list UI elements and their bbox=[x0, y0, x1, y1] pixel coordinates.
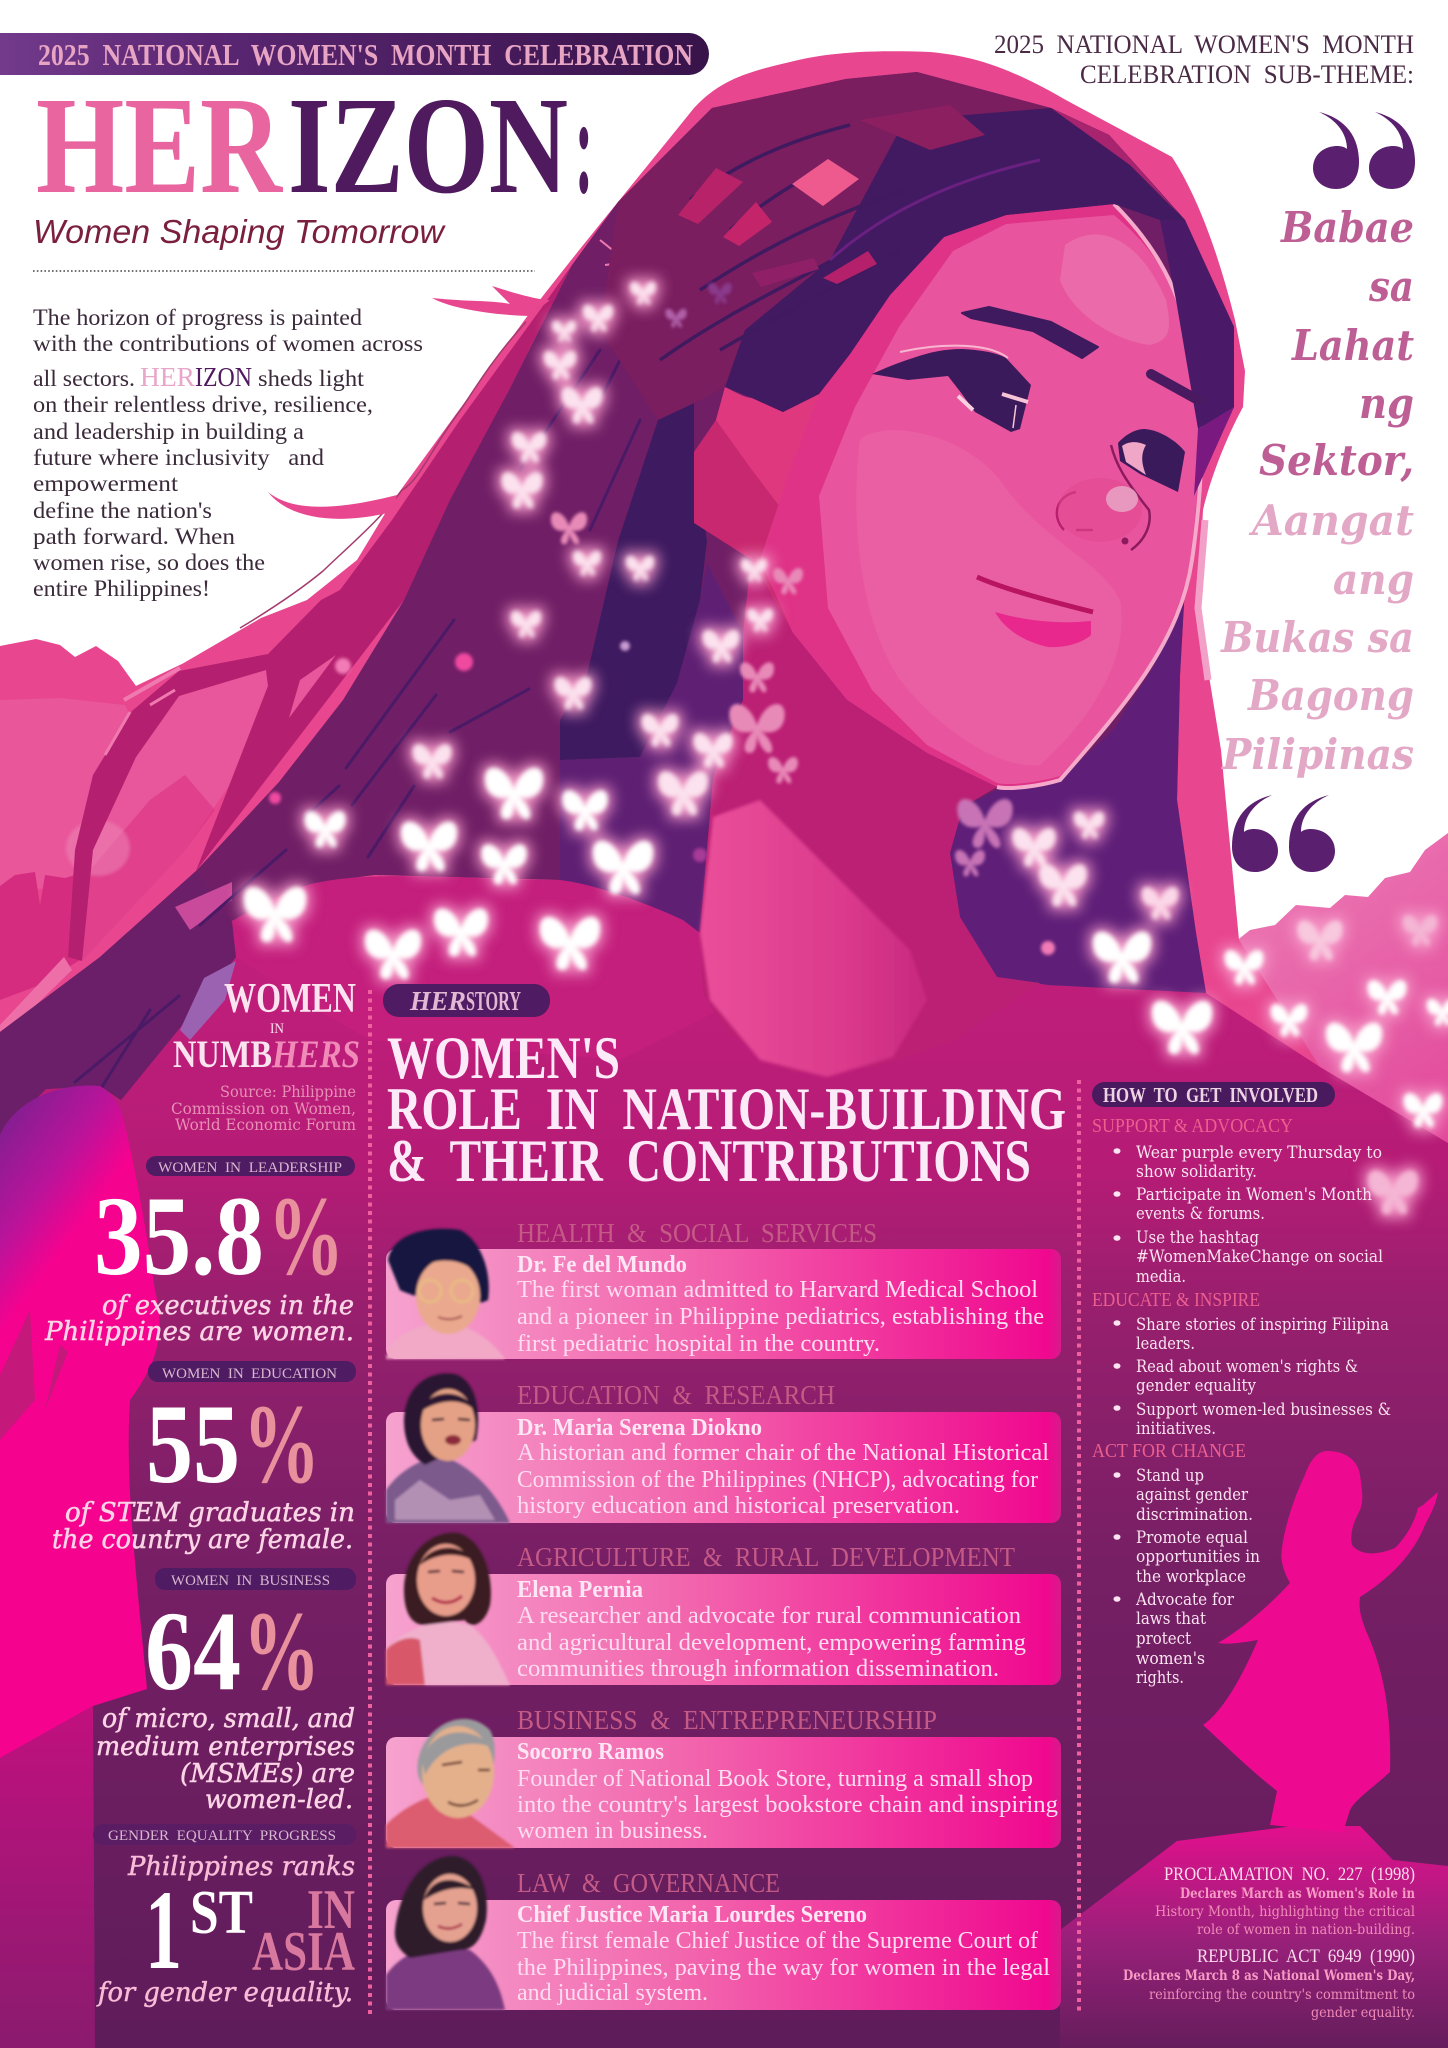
card: health & social services: first pediatric hospital in the country. bbox=[517, 1331, 880, 1357]
stat: women in business: 64 bbox=[145, 1589, 241, 1714]
eyebrow right bbox=[1151, 374, 1198, 400]
how to get involved list: Use the hashtag bbox=[1136, 1228, 1259, 1248]
face bbox=[600, 72, 1234, 788]
dark central hair band bbox=[560, 403, 707, 760]
sub-theme quote: Sektor, bbox=[1259, 436, 1414, 485]
sub-theme heading: CELEBRATION SUB-THEME: bbox=[1080, 60, 1414, 89]
how to get involved list: Advocate for bbox=[1135, 1590, 1235, 1610]
card: business & entrepreneurship: Founder of National Book Store, turning a small shop bbox=[517, 1766, 1033, 1792]
main heading: WOMEN'S bbox=[387, 1025, 620, 1091]
glowing dots bbox=[269, 641, 1055, 955]
intro paragraph: with the contributions of women across bbox=[33, 331, 423, 356]
portrait: Dr. Maria Serena Diokno bbox=[386, 1373, 510, 1523]
how to get involved list: Participate in Women's Month bbox=[1136, 1185, 1372, 1205]
main heading: & THEIR CONTRIBUTIONS bbox=[387, 1128, 1031, 1194]
portrait: Socorro Ramos bbox=[386, 1719, 515, 1848]
intro paragraph: and leadership in building a bbox=[33, 419, 304, 444]
card: education & research bbox=[386, 1373, 1061, 1523]
sub-theme quote: Bagong bbox=[1247, 671, 1414, 720]
sub-theme quote bbox=[1220, 203, 1414, 779]
portrait: Elena Pernia bbox=[386, 1533, 510, 1685]
legal references: REPUBLIC ACT 6949 (1990) bbox=[1197, 1946, 1415, 1967]
butterflies: pink, no glow bbox=[551, 283, 1013, 876]
how to get involved list: opportunities in bbox=[1136, 1547, 1260, 1567]
card: business & entrepreneurship: women in business. bbox=[517, 1818, 708, 1844]
stat: gender equality progress bbox=[93, 1824, 356, 2008]
card: business & entrepreneurship: BUSINESS & ENTREPRENEURSHIP bbox=[517, 1705, 937, 1735]
title: HERIZON: IZON bbox=[288, 69, 568, 223]
stat: women in business: % bbox=[243, 1589, 320, 1714]
HERSTORY pill bbox=[383, 984, 550, 1017]
stat: gender equality progress: 1 bbox=[145, 1868, 182, 1993]
card: law & governance bbox=[386, 1856, 1061, 2010]
top banner: 2025 NATIONAL WOMEN'S MONTH CELEBRATION bbox=[38, 37, 693, 72]
sub-theme quote: Aangat bbox=[1248, 496, 1414, 545]
how to get involved pill: HOW TO GET INVOLVED bbox=[1103, 1083, 1318, 1107]
stat: women in business: (MSMEs) are bbox=[180, 1759, 355, 1789]
hair flicks bbox=[432, 286, 550, 316]
stat: women in business: medium enterprises bbox=[96, 1732, 355, 1762]
card: education & research: A historian and former chair of the National Historical bbox=[517, 1440, 1049, 1466]
stat: women in business: WOMEN IN BUSINESS bbox=[171, 1573, 330, 1589]
card: law & governance: the Philippines, paving the way for women in the legal bbox=[517, 1955, 1050, 1981]
how to get involved list: discrimination. bbox=[1136, 1505, 1253, 1525]
intro paragraph bbox=[33, 305, 423, 601]
title: HERIZON bbox=[36, 69, 593, 223]
card: agriculture & rural development: communities through information dissemination. bbox=[517, 1656, 999, 1682]
hair streaks bbox=[75, 300, 650, 1090]
sub-theme quote: Bukas sa bbox=[1220, 613, 1414, 662]
card: law & governance: LAW & GOVERNANCE bbox=[517, 1868, 780, 1898]
how to get involved list: Stand up bbox=[1136, 1466, 1204, 1486]
how to get involved list: SUPPORT & ADVOCACY bbox=[1092, 1115, 1293, 1137]
legal references: role of women in nation-building. bbox=[1197, 1922, 1415, 1938]
dark hair right of neck bbox=[950, 496, 1206, 993]
card: agriculture & rural development: A researcher and advocate for rural communication bbox=[517, 1603, 1021, 1629]
left silhouette: woman in hot pink bbox=[0, 1085, 160, 2048]
intro paragraph: IZON bbox=[195, 362, 252, 392]
how to get involved list: rights. bbox=[1136, 1668, 1184, 1688]
inner hair band bbox=[68, 265, 572, 961]
stat: gender equality progress: for gender equality. bbox=[96, 1978, 353, 2008]
intro paragraph: sheds light bbox=[258, 366, 365, 391]
portrait: Chief Justice Maria Lourdes Sereno bbox=[386, 1856, 505, 2010]
inner veil window bbox=[82, 670, 268, 961]
how to get involved list: EDUCATE & INSPIRE bbox=[1092, 1289, 1260, 1311]
heading: Women in NumbHERS: HERS bbox=[271, 1033, 360, 1076]
shoulder bbox=[232, 876, 720, 1060]
source note: Source: Philippine bbox=[220, 1082, 356, 1101]
left cloud background bbox=[0, 639, 300, 1060]
card: agriculture & rural development: and agricultural development, empowering farming bbox=[517, 1630, 1026, 1656]
card: education & research: Dr. Maria Serena Diokno bbox=[517, 1415, 762, 1441]
intro paragraph: HER bbox=[140, 362, 195, 392]
nose bbox=[1111, 445, 1150, 550]
right silhouette: dancing woman on hill bbox=[1060, 1451, 1448, 2048]
top banner bbox=[0, 33, 709, 75]
card: health & social services: HEALTH & SOCIAL SERVICES bbox=[517, 1218, 877, 1248]
stat: women in education: of STEM graduates in bbox=[65, 1498, 355, 1528]
eyebrow left bbox=[962, 307, 1098, 358]
hair tiles bbox=[792, 159, 859, 206]
card: business & entrepreneurship: Socorro Ramos bbox=[517, 1739, 664, 1765]
heading: Women in NumbHERS: NUMB bbox=[173, 1033, 272, 1076]
card: education & research: history education and historical preservation. bbox=[517, 1493, 960, 1519]
how to get involved list: leaders. bbox=[1136, 1334, 1195, 1354]
lilac hair patches bbox=[175, 882, 232, 930]
heading: Women in NumbHERS: WOMEN bbox=[224, 976, 356, 1022]
main hair mass bbox=[0, 72, 1234, 1135]
card: business & entrepreneurship: into the country's largest bookstore chain and inspiring bbox=[517, 1792, 1058, 1818]
stat: women in business: of micro, small, and bbox=[102, 1704, 355, 1734]
sub-theme heading: 2025 NATIONAL WOMEN'S MONTH bbox=[994, 30, 1414, 59]
how to get involved list: Support women-led businesses & bbox=[1136, 1400, 1391, 1420]
card: education & research: EDUCATION & RESEARCH bbox=[517, 1380, 835, 1410]
HERSTORY pill: HER bbox=[409, 986, 466, 1016]
stat: gender equality progress: GENDER EQUALITY PROGRESS bbox=[108, 1828, 336, 1844]
hair fringe bbox=[600, 72, 1234, 420]
how to get involved list: show solidarity. bbox=[1136, 1162, 1257, 1182]
eye left bbox=[872, 349, 1031, 432]
card: law & governance: The first female Chief Justice of the Supreme Court of bbox=[517, 1928, 1038, 1954]
stat: women in leadership: % bbox=[268, 1174, 344, 1299]
card: agriculture & rural development bbox=[386, 1533, 1061, 1685]
intro paragraph: entire Philippines! bbox=[33, 576, 210, 601]
HERSTORY pill: STORY bbox=[466, 986, 521, 1016]
how to get involved list: the workplace bbox=[1136, 1567, 1246, 1587]
heading: Women in NumbHERS bbox=[173, 976, 360, 1076]
main heading bbox=[387, 1025, 1066, 1194]
legal references: PROCLAMATION NO. 227 (1998) bbox=[1164, 1864, 1415, 1885]
stat: women in education: 55 bbox=[146, 1382, 240, 1507]
card: education & research: Commission of the Philippines (NHCP), advocating for bbox=[517, 1467, 1038, 1493]
eye right bbox=[1118, 429, 1185, 492]
sub-theme quote: sa bbox=[1368, 262, 1414, 311]
right cloud background bbox=[1205, 833, 1448, 1150]
intro paragraph: all sectors. bbox=[33, 366, 135, 391]
how to get involved list: media. bbox=[1136, 1267, 1186, 1287]
card: health & social services bbox=[386, 1218, 1061, 1359]
stat: women in leadership: of executives in the bbox=[102, 1291, 354, 1321]
butterflies: bright lower bbox=[244, 768, 1448, 1214]
card: agriculture & rural development: AGRICULTURE & RURAL DEVELOPMENT bbox=[517, 1542, 1015, 1572]
stat: women in education: % bbox=[243, 1382, 320, 1507]
sub-theme quote: Babae bbox=[1280, 203, 1414, 252]
stat: women in business bbox=[96, 1568, 356, 1815]
stat: women in education bbox=[52, 1361, 356, 1555]
sub-theme quote: ang bbox=[1333, 555, 1414, 604]
intro paragraph: path forward. When bbox=[33, 524, 236, 549]
neck bbox=[700, 550, 1040, 1073]
legal references: History Month, highlighting the critical bbox=[1155, 1904, 1415, 1920]
how to get involved list: initiatives. bbox=[1136, 1419, 1216, 1439]
ear side bbox=[694, 387, 860, 633]
main heading: ROLE IN NATION-BUILDING bbox=[387, 1076, 1066, 1142]
mouth bbox=[977, 577, 1093, 612]
sub-theme quote: ng bbox=[1359, 379, 1414, 428]
intro paragraph: empowerment bbox=[33, 471, 179, 496]
how to get involved list: ACT FOR CHANGE bbox=[1092, 1440, 1246, 1462]
veil bbox=[136, 51, 1320, 1067]
legal references: gender equality. bbox=[1311, 2005, 1415, 2021]
stat: women in leadership: WOMEN IN LEADERSHIP bbox=[158, 1160, 342, 1176]
stat: women in education: the country are female. bbox=[52, 1525, 353, 1555]
sub-theme heading bbox=[994, 30, 1414, 89]
intro paragraph: The horizon of progress is painted bbox=[33, 305, 363, 330]
stat: gender equality progress: Philippines ranks bbox=[127, 1852, 355, 1882]
stat: women in business: women-led. bbox=[205, 1785, 353, 1815]
portrait: Dr. Fe del Mundo bbox=[386, 1229, 505, 1359]
how to get involved list: women's bbox=[1136, 1649, 1205, 1669]
how to get involved list: against gender bbox=[1136, 1485, 1249, 1505]
card: law & governance: and judicial system. bbox=[517, 1980, 708, 2006]
how to get involved list: #WomenMakeChange on social bbox=[1136, 1247, 1383, 1267]
stat: gender equality progress: ST bbox=[190, 1879, 253, 1947]
sub-theme quote: Lahat bbox=[1291, 321, 1414, 370]
card: health & social services: and a pioneer in Philippine pediatrics, establishing the bbox=[517, 1304, 1044, 1330]
source note: Commission on Women, bbox=[171, 1099, 356, 1118]
stat: women in leadership bbox=[44, 1156, 355, 1347]
sub-theme quote: Pilipinas bbox=[1221, 730, 1414, 779]
icon: opening quotation marks bbox=[1232, 795, 1335, 872]
intro paragraph: define the nation's bbox=[33, 498, 212, 523]
how to get involved list: gender equality bbox=[1136, 1376, 1256, 1396]
stat: gender equality progress: IN bbox=[307, 1879, 355, 1941]
intro paragraph: future where inclusivity and bbox=[33, 445, 325, 470]
card: law & governance: Chief Justice Maria Lourdes Sereno bbox=[517, 1902, 867, 1928]
card: health & social services: Dr. Fe del Mundo bbox=[517, 1252, 687, 1278]
stat: women in education: WOMEN IN EDUCATION bbox=[162, 1366, 337, 1382]
how to get involved list bbox=[1092, 1115, 1391, 1688]
outer hair strand curves bbox=[105, 95, 805, 755]
source note bbox=[171, 1082, 356, 1134]
stat: women in leadership: Philippines are women. bbox=[44, 1317, 354, 1347]
stat: women in leadership: 35.8 bbox=[94, 1174, 264, 1299]
text: : bbox=[575, 69, 593, 223]
legal references: reinforcing the country's commitment to bbox=[1149, 1987, 1415, 2003]
how to get involved list: events & forums. bbox=[1136, 1204, 1265, 1224]
how to get involved list: Read about women's rights & bbox=[1136, 1357, 1358, 1377]
lower background bbox=[0, 880, 1448, 2048]
card: business & entrepreneurship bbox=[386, 1705, 1061, 1848]
how to get involved list: laws that bbox=[1136, 1609, 1206, 1629]
how to get involved list: protect bbox=[1136, 1629, 1191, 1649]
stat: gender equality progress: ASIA bbox=[252, 1921, 355, 1983]
icon: closing quotation marks bbox=[1313, 112, 1415, 189]
how to get involved list: Wear purple every Thursday to bbox=[1136, 1143, 1382, 1163]
butterflies: pale upper bbox=[413, 282, 1104, 906]
card: agriculture & rural development: Elena Pernia bbox=[517, 1577, 643, 1603]
title: HERIZON: HER bbox=[36, 69, 283, 223]
intro paragraph: on their relentless drive, resilience, bbox=[33, 392, 373, 417]
intro paragraph: women rise, so does the bbox=[33, 550, 265, 575]
how to get involved list: Share stories of inspiring Filipina bbox=[1136, 1315, 1389, 1335]
subtitle: Women Shaping Tomorrow bbox=[33, 213, 446, 250]
card: health & social services: The first woman admitted to Harvard Medical School bbox=[517, 1277, 1038, 1303]
how to get involved list: Promote equal bbox=[1136, 1528, 1248, 1548]
heading: Women in NumbHERS: IN bbox=[270, 1021, 284, 1037]
source note: World Economic Forum bbox=[175, 1115, 356, 1134]
legal references bbox=[1123, 1864, 1415, 2021]
